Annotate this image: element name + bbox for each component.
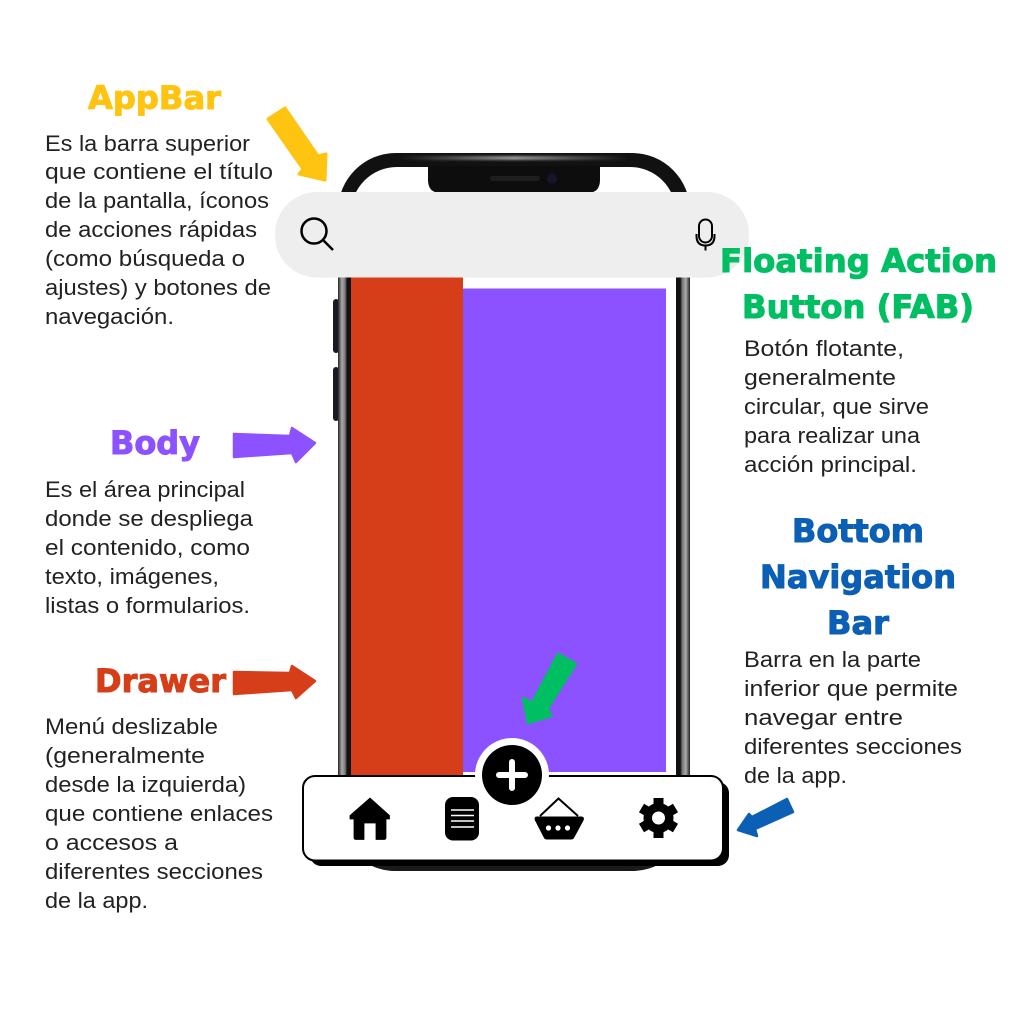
heading: Floating Action Button: Button (FAB): [742, 288, 974, 326]
body panel: [463, 288, 666, 772]
text: fab body: [744, 336, 929, 477]
panel: body description: [45, 424, 254, 618]
text: drawer body: diferentes secciones: [45, 859, 263, 884]
top bezel highlight: [400, 156, 628, 160]
text: bottom navigation body: navegar entre: [744, 705, 903, 730]
heading: Bottom Navigation Bar: Navigation: [760, 558, 956, 596]
nav surface: [303, 776, 723, 860]
phone body: [338, 153, 690, 871]
heading: Bottom Navigation Bar: Bottom: [792, 512, 924, 550]
arrow: body: [234, 428, 315, 462]
speaker: [490, 176, 540, 181]
arrow: bottom navigation: [738, 799, 793, 836]
heading: Body: Body: [110, 424, 200, 462]
text: drawer body: que contiene enlaces: [45, 801, 273, 826]
text: drawer body: desde la izquierda): [45, 772, 246, 797]
text: bottom navigation body: inferior que permite: [744, 676, 958, 701]
panel: fab description: [720, 242, 997, 477]
text: fab body: circular, que sirve: [744, 394, 929, 419]
text: bottom navigation body: Barra en la parte: [744, 647, 921, 672]
text: body description: Es el área principal: [45, 477, 245, 502]
appbar background: [275, 192, 749, 278]
text: appbar body: de la pantalla, íconos: [45, 188, 269, 213]
fab circle: [482, 745, 542, 805]
text: fab body: para realizar una: [744, 423, 921, 448]
heading: Bottom Navigation Bar: [760, 512, 956, 642]
text: fab body: Botón flotante,: [744, 336, 904, 361]
icon: search: [302, 218, 333, 250]
floating action button: [475, 738, 549, 812]
text: appbar body: (como búsqueda o: [45, 246, 245, 271]
icon: microphone: [696, 220, 714, 250]
fab ring: [475, 738, 549, 812]
side buttons: [333, 299, 339, 421]
text: body description: el contenido, como: [45, 535, 250, 560]
text: appbar body: [45, 131, 273, 329]
icon: plus: [499, 762, 525, 788]
text: body description: listas o formularios.: [45, 593, 250, 618]
panel: drawer description: [45, 662, 273, 913]
phone screen: [351, 167, 676, 857]
heading: Floating Action Button: Floating Action: [720, 242, 997, 280]
camera: [547, 174, 557, 184]
heading: Floating Action Button: [720, 242, 997, 326]
panel: appbar description: [45, 79, 273, 329]
text: drawer body: o accesos a: [45, 830, 179, 855]
text: drawer body: Menú deslizable: [45, 714, 218, 739]
text: appbar body: de acciones rápidas: [45, 217, 257, 242]
text: bottom navigation body: diferentes secciones: [744, 734, 962, 759]
text: bottom navigation body: [744, 647, 962, 788]
text: appbar body: ajustes) y botones de: [45, 275, 271, 300]
text: body description: texto, imágenes,: [45, 564, 219, 589]
appbar: [275, 192, 749, 278]
arrow: fab: [523, 654, 576, 723]
right bezel: [676, 277, 690, 787]
phone mockup: [333, 153, 690, 871]
arrow: drawer: [234, 666, 315, 698]
heading: Bottom Navigation Bar: Bar: [827, 604, 889, 642]
notch: [428, 166, 600, 193]
text: fab body: generalmente: [744, 365, 896, 390]
bottom navigation bar: [303, 776, 729, 871]
phone chin: [362, 860, 664, 871]
drawer panel: [351, 277, 463, 777]
text: fab body: acción principal.: [744, 452, 917, 477]
text: drawer body: [45, 714, 273, 913]
text: drawer body: (generalmente: [45, 743, 205, 768]
text: body description: [45, 477, 254, 618]
text: appbar body: que contiene el título: [45, 159, 273, 184]
text: bottom navigation body: de la app.: [744, 763, 847, 788]
heading: Drawer: Drawer: [95, 662, 226, 700]
icon: list: [445, 797, 479, 840]
text: appbar body: Es la barra superior: [45, 131, 250, 156]
nav shadow: [310, 782, 729, 866]
icon: basket: [535, 798, 584, 840]
panel: bottom navigation description: [744, 512, 962, 788]
icon: home: [350, 798, 390, 840]
left bezel: [338, 277, 351, 787]
arrow: appbar: [268, 108, 326, 180]
heading: AppBar: AppBar: [88, 79, 221, 117]
icon: gear: [642, 798, 676, 838]
text: body description: donde se despliega: [45, 506, 254, 531]
text: appbar body: navegación.: [45, 304, 174, 329]
text: drawer body: de la app.: [45, 888, 148, 913]
